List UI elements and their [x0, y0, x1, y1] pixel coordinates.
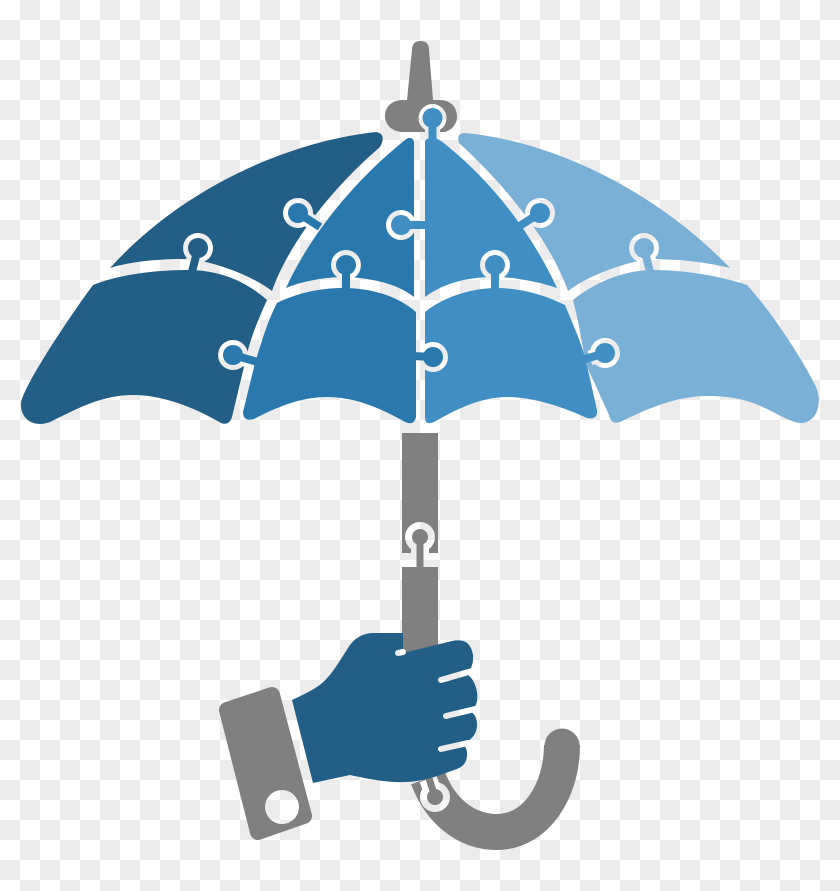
puzzle knobs: dark — [188, 238, 208, 272]
puzzle knobs: mid blue — [391, 108, 615, 363]
umbrella shaft — [402, 433, 438, 662]
panel: dark top — [110, 132, 383, 291]
panel: light top — [458, 133, 730, 291]
puzzle joint gaps — [183, 104, 659, 372]
puzzle knobs: light blue — [634, 238, 654, 272]
panel: mid bottom — [425, 288, 597, 423]
panel: medium bottom — [243, 288, 416, 423]
hand gripping the handle — [292, 633, 477, 783]
panel: light bottom — [573, 270, 819, 423]
panel: mid top — [425, 138, 557, 297]
panel: dark bottom — [21, 270, 267, 424]
puzzle knobs: medium blue — [223, 203, 443, 367]
curved umbrella hook — [420, 728, 580, 832]
umbrella tip — [385, 41, 457, 132]
shirt cuff with button — [227, 695, 304, 832]
panel: medium top — [286, 138, 414, 297]
